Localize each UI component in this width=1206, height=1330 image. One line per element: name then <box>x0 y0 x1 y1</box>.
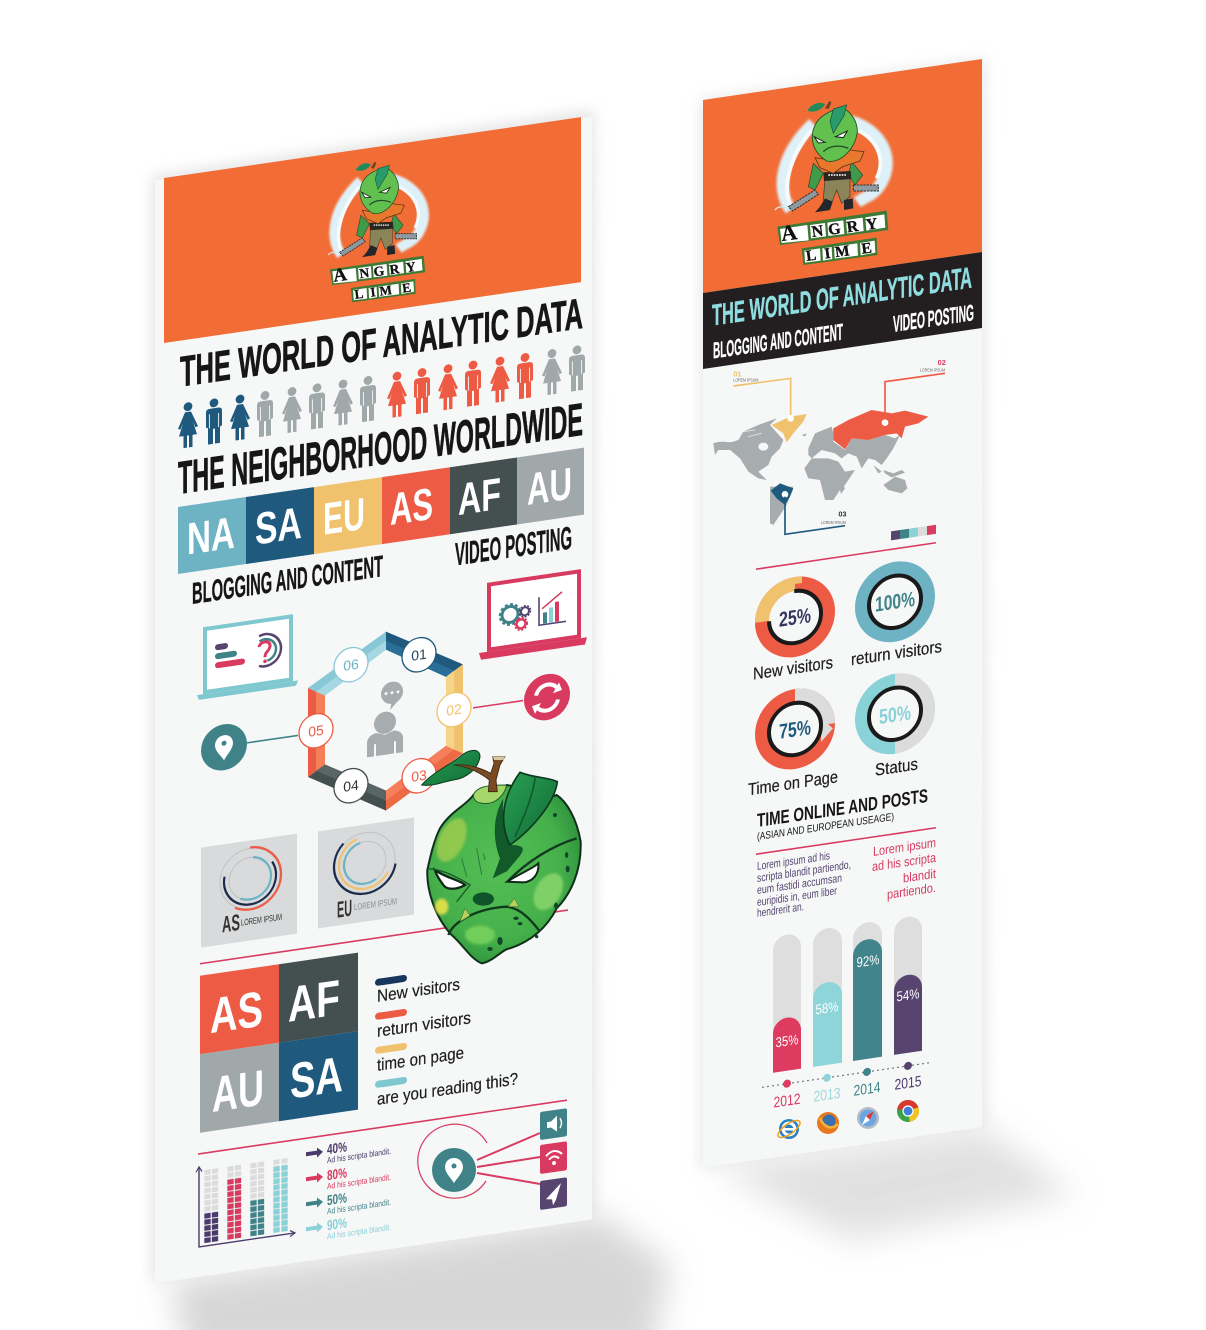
panel: right infographic: BLOGGING AND CONTENT <box>713 319 843 364</box>
icon: person with speech bubble <box>367 680 403 757</box>
callout 01 <box>733 370 791 415</box>
connector and location pin <box>201 713 298 774</box>
logo: left header: M <box>379 282 393 299</box>
bar chart: yearly percentages: 2012 <box>774 1091 800 1112</box>
card: AS rings: AS <box>222 909 240 938</box>
title: THE WORLD OF ANALYTIC DATA <box>180 290 583 397</box>
highlights <box>430 813 569 944</box>
icon: internet explorer <box>775 1117 803 1141</box>
orange header <box>703 59 982 293</box>
donut: time on page: 75% <box>779 716 811 744</box>
body text: euripidis in, eum liber <box>757 885 837 909</box>
logo: right header: I <box>823 245 832 263</box>
continent colour bar: AU <box>527 458 572 515</box>
legend: return visitors <box>377 1008 471 1041</box>
legend <box>375 958 518 1109</box>
step 01 <box>402 635 436 674</box>
stat list: Ad his scripta blandit. <box>327 1197 391 1216</box>
subtitle: THE NEIGHBORHOOD WORLDWIDE <box>178 393 583 504</box>
step 06: 06 <box>343 656 359 674</box>
logo: right header: L <box>805 247 817 265</box>
callout 01: 01 <box>733 370 741 379</box>
logo: right header: M <box>834 242 851 261</box>
callout 03: LOREM IPSUM <box>821 520 846 525</box>
stat list: Ad his scripta blandit. <box>327 1146 391 1165</box>
stat list: 90% <box>327 1214 347 1233</box>
step 02 <box>437 690 471 729</box>
panel: left infographic: BLOGGING AND CONTENT <box>192 550 383 611</box>
step 04: 04 <box>343 777 359 795</box>
logo: left header <box>328 162 425 302</box>
red callout text: partiendo. <box>887 880 936 902</box>
continent colour bar: NA <box>187 507 235 565</box>
red callout text <box>872 835 937 904</box>
logo: left header: L <box>354 286 364 302</box>
legend: time on page <box>377 1043 464 1075</box>
laptop icon: settings and chart <box>479 570 587 660</box>
logo: right header: A <box>779 219 799 246</box>
logo: right header: G <box>827 220 842 239</box>
logo: right header: N <box>811 223 825 241</box>
step 03 <box>402 756 436 795</box>
colour swatches <box>891 525 936 540</box>
body text: hendrerit an. <box>757 901 804 920</box>
heading: time online and posts: TIME ONLINE AND POSTS <box>757 786 928 832</box>
donut: new visitors: 25% <box>779 604 811 632</box>
continent colour bar: AF <box>458 468 501 525</box>
icon: paper plane tile <box>540 1177 567 1210</box>
greenland <box>772 414 807 442</box>
black title band <box>703 252 982 369</box>
halo: left panel <box>152 110 596 1282</box>
islands <box>840 465 905 494</box>
card: EU rings <box>318 818 414 929</box>
stat list: Ad his scripta blandit. <box>327 1222 391 1241</box>
logo: left header: Y <box>405 259 417 275</box>
donut: return visitors: 100% <box>875 588 915 617</box>
title: THE WORLD OF ANALYTIC DATA <box>712 262 972 333</box>
donut: time on page <box>762 691 828 767</box>
red callout text: blandit <box>903 866 936 886</box>
step 06 <box>334 645 368 684</box>
logo: right header <box>775 101 888 265</box>
people row <box>178 344 585 449</box>
logo: right header: R <box>846 218 860 236</box>
continent colour bar: AS <box>390 478 433 535</box>
continent grid: AS <box>210 981 263 1044</box>
step 05 <box>299 711 333 750</box>
donut: status <box>862 676 928 752</box>
halo: right panel <box>700 58 987 1170</box>
red callout text: ad his scripta <box>872 850 937 874</box>
body text: eum fastidi accumsan <box>757 873 842 897</box>
laptop icon: question <box>197 615 298 700</box>
continent colour bar <box>178 448 584 574</box>
card: EU rings: LOREM IPSUM <box>354 896 397 912</box>
donut: return visitors <box>862 564 928 640</box>
stat list: 80% <box>327 1164 347 1183</box>
step 01: 01 <box>411 646 427 664</box>
bar chart: yearly percentages: 92% <box>856 951 879 970</box>
bar chart: yearly percentages: 2013 <box>813 1085 840 1106</box>
logo: left header: I <box>369 284 376 300</box>
stat list: 50% <box>327 1189 347 1208</box>
location hub with connectors <box>418 1124 540 1198</box>
australia <box>883 477 907 493</box>
step 03: 03 <box>411 767 427 785</box>
shadow: left panel <box>170 1215 670 1330</box>
icon: speaker tile <box>540 1108 567 1140</box>
callout 02: 02 <box>938 358 946 367</box>
logo: left header: G <box>373 263 386 279</box>
panel background <box>703 59 982 1168</box>
panel: right infographic <box>703 59 982 1168</box>
callout 02: LOREM IPSUM <box>920 368 945 373</box>
subheading: (ASIAN AND EUROPEAN USEAGE) <box>757 811 894 843</box>
legend: are you reading this? <box>377 1069 518 1109</box>
logo: left header: A <box>332 264 349 287</box>
icon: wifi tile <box>540 1141 567 1174</box>
icon: firefox <box>817 1112 839 1134</box>
text: VIDEO POSTING <box>893 299 974 337</box>
divider line <box>198 1100 567 1154</box>
donut labels: Time on Page <box>748 767 838 799</box>
callout 01: LOREM IPSUM <box>733 378 758 383</box>
logo: left header: N <box>358 265 370 281</box>
donut: new visitors <box>762 579 828 655</box>
body text <box>757 847 851 920</box>
russia <box>833 410 928 449</box>
logo: right header: E <box>860 239 873 258</box>
africa <box>804 458 855 500</box>
divider line <box>756 543 936 569</box>
step 04 <box>334 766 368 805</box>
continent colour bar: SA <box>255 497 302 555</box>
bar chart: yearly percentages: 2014 <box>854 1079 880 1100</box>
bar chart: yearly percentages: 2015 <box>894 1073 921 1094</box>
continent grid: AU <box>212 1060 264 1123</box>
legend: New visitors <box>377 975 460 1006</box>
continent grid: SA <box>290 1046 343 1110</box>
callout 02 <box>885 358 946 418</box>
card: AS rings <box>201 834 297 948</box>
body text: scripta blandit partiendo, <box>757 859 851 885</box>
continent colour bar: EU <box>323 488 365 545</box>
orange header <box>164 117 581 343</box>
map pins <box>782 415 888 498</box>
donut labels: return visitors <box>851 637 942 669</box>
panel: left infographic: VIDEO POSTING <box>455 520 572 572</box>
continent grid: AF <box>288 970 340 1033</box>
stat list: 40% <box>327 1138 347 1157</box>
hexagon process diagram <box>299 619 471 823</box>
step 05: 05 <box>308 722 324 740</box>
brazil <box>771 483 793 505</box>
panel: left infographic <box>155 116 592 1283</box>
divider line <box>756 828 936 854</box>
stat list <box>306 1132 391 1244</box>
shadow: right panel <box>715 1128 1075 1240</box>
logo: right header: Y <box>865 215 879 234</box>
mascot: angry lime <box>422 750 581 963</box>
bar chart: yearly percentages: 58% <box>816 998 838 1017</box>
card: AS rings: LOREM IPSUM <box>241 912 282 928</box>
stacked block chart <box>196 1153 295 1250</box>
body text: Lorem ipsum ad his <box>757 850 830 873</box>
logo: left header: R <box>389 261 401 277</box>
panel background <box>155 117 592 1283</box>
card: EU rings: EU <box>337 895 352 923</box>
callout 03 <box>785 497 846 534</box>
world map <box>713 410 928 525</box>
divider line <box>200 910 568 964</box>
eurasia <box>808 427 900 468</box>
stat list: Ad his scripta blandit. <box>327 1172 391 1191</box>
icon: chrome <box>898 1101 918 1121</box>
step 02: 02 <box>446 701 462 719</box>
south america <box>770 487 793 525</box>
north america <box>713 418 807 480</box>
connector and refresh icon <box>473 671 570 731</box>
bar chart: yearly percentages <box>762 913 930 1113</box>
red callout text: Lorem ipsum <box>873 835 936 859</box>
callout 03: 03 <box>838 510 846 519</box>
continent grid <box>200 953 358 1133</box>
bar chart: yearly percentages: 54% <box>896 985 919 1005</box>
donut labels: New visitors <box>753 653 833 684</box>
icon: safari <box>857 1107 879 1129</box>
donut labels <box>748 637 942 799</box>
logo: left header: E <box>401 280 412 296</box>
donut labels: Status <box>875 754 918 780</box>
bar chart: yearly percentages: 35% <box>776 1031 798 1050</box>
donut: status: 50% <box>879 701 911 729</box>
